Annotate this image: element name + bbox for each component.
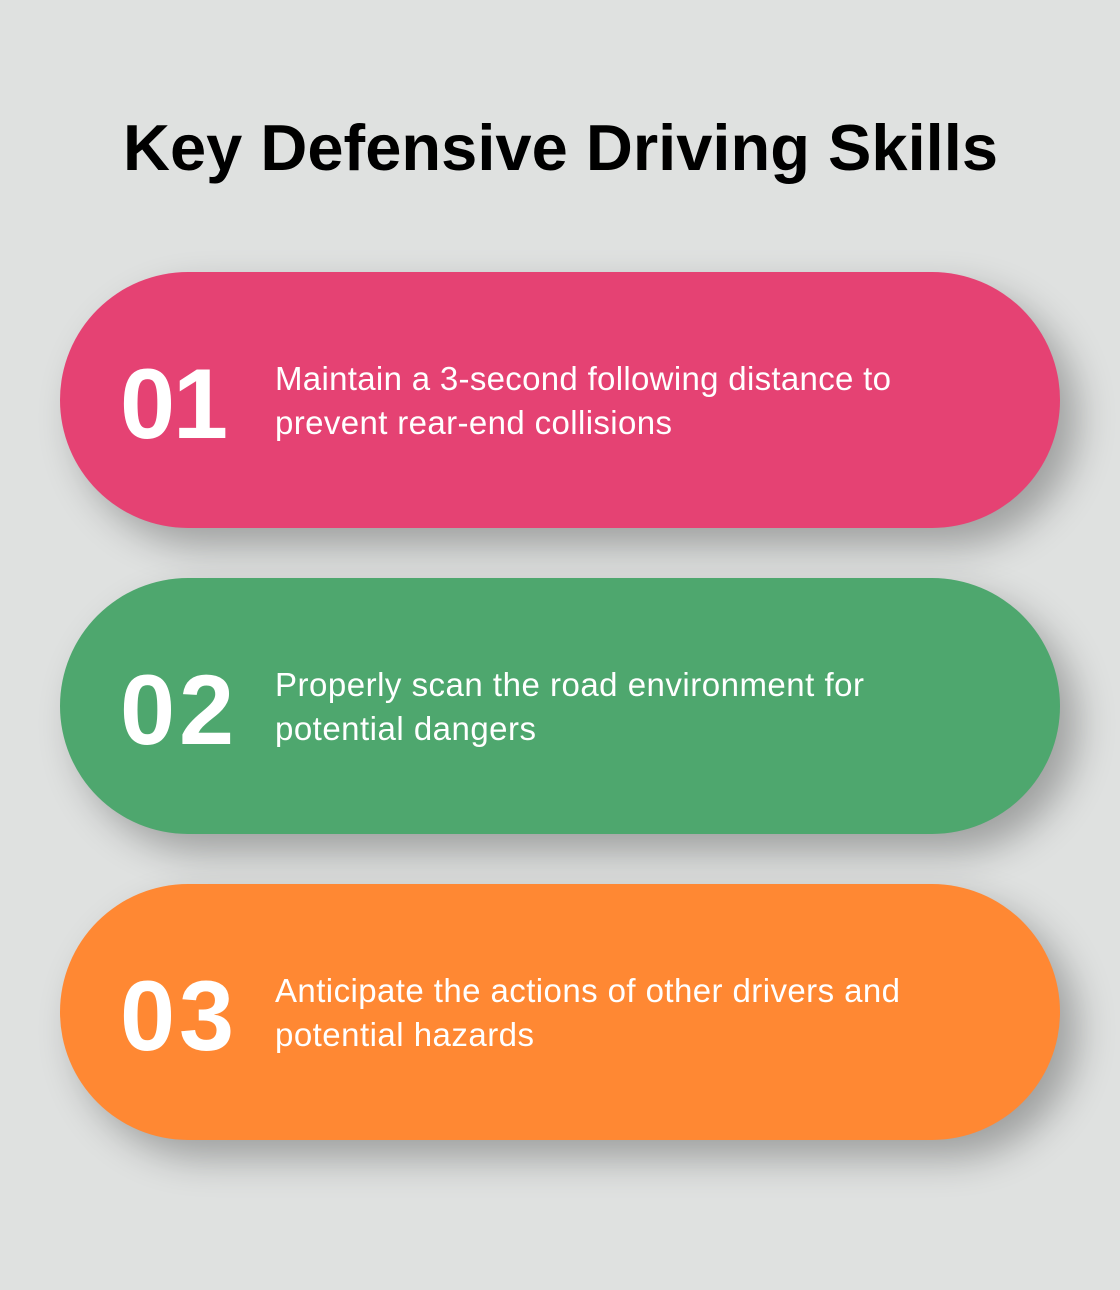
number 01: 01: [120, 348, 228, 459]
pill: step 3 background: [60, 884, 1060, 1140]
pill: step 1 background: [60, 272, 1060, 528]
step 2 description: [275, 666, 864, 747]
step 1 content: [120, 348, 891, 459]
number 02: 02: [120, 654, 234, 765]
step 2 description: Properly scan the road environment for: [275, 666, 864, 703]
step 3 description: potential hazards: [275, 1016, 534, 1053]
step 1 description: [275, 360, 891, 441]
step 3 content: [120, 960, 900, 1071]
number 03: 03: [120, 960, 234, 1071]
step 1 description: prevent rear-end collisions: [275, 404, 672, 441]
title: Key Defensive Driving Skills: [123, 111, 998, 184]
pill: step 2 background: [60, 578, 1060, 834]
step 1 description: Maintain a 3-second following distance to: [275, 360, 891, 397]
step 3 description: [275, 972, 900, 1053]
step 2 content: [120, 654, 864, 765]
step 3 description: Anticipate the actions of other drivers and: [275, 972, 900, 1009]
step 2 description: potential dangers: [275, 710, 536, 747]
